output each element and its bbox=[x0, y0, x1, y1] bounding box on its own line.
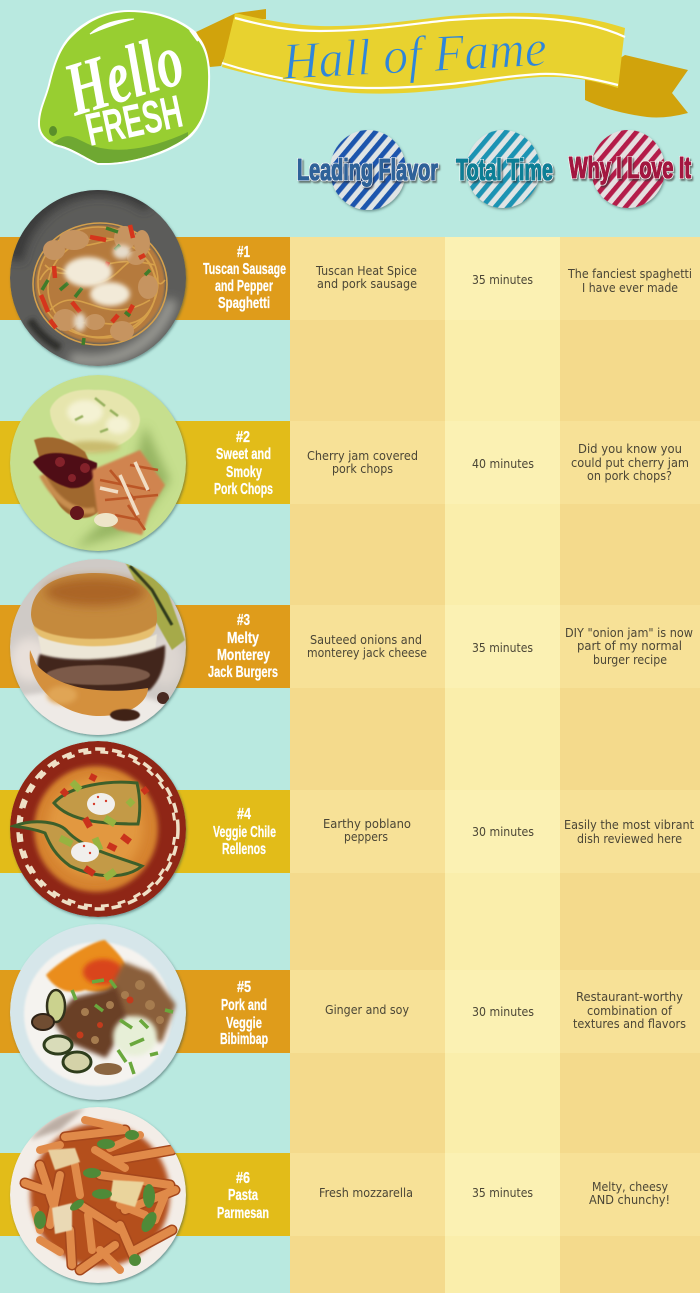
row 2 text: on pork chops? bbox=[587, 468, 672, 483]
logo wordmark Hello: Hello bbox=[55, 17, 193, 132]
label: #5 bbox=[220, 979, 268, 1048]
row 1 text: 35 minutes bbox=[472, 272, 533, 287]
label: #1: Tuscan Sausage bbox=[203, 261, 286, 278]
label: #1: and Pepper bbox=[215, 278, 273, 295]
row 6 text: 35 minutes bbox=[472, 1185, 533, 1200]
label: #2: Pork Chops bbox=[214, 481, 273, 498]
row 6 text: Melty, cheesy bbox=[592, 1179, 669, 1194]
row 1 text: I have ever made bbox=[582, 280, 678, 295]
label: #3: Melty bbox=[227, 630, 259, 647]
dish 1: Tuscan sausage spaghetti bbox=[10, 188, 186, 366]
row bands bbox=[0, 237, 290, 1236]
row 1 text: Tuscan Heat Spice bbox=[315, 263, 417, 278]
label: #5: Veggie bbox=[226, 1015, 262, 1032]
label: #2: Sweet and bbox=[216, 446, 271, 463]
label: #6: Parmesan bbox=[217, 1205, 269, 1222]
label: #5: Pork and bbox=[221, 997, 267, 1014]
row 5 text: 30 minutes bbox=[472, 1004, 534, 1019]
row 3 text: 35 minutes bbox=[472, 640, 533, 655]
row 3 text bbox=[307, 625, 693, 667]
row 1 text: and pork sausage bbox=[317, 276, 417, 291]
label: #3 bbox=[208, 612, 278, 681]
row 2 text: pork chops bbox=[332, 461, 393, 476]
row 4 text: 30 minutes bbox=[472, 824, 534, 839]
table grid bbox=[290, 237, 700, 1293]
label: #5: Bibimbap bbox=[220, 1031, 268, 1048]
column heading: Total Time bbox=[456, 130, 553, 208]
row 3 text: Sauteed onions and bbox=[310, 632, 422, 647]
label: #4: Rellenos bbox=[222, 841, 266, 858]
label: #6 bbox=[217, 1170, 269, 1222]
row 5 text bbox=[325, 989, 686, 1031]
row 1 text bbox=[315, 263, 692, 295]
title: Hall of Fame: Hall of Fame bbox=[281, 20, 548, 91]
dish 3: Melty Monterey Jack burger bbox=[0, 559, 186, 739]
row 4 text: dish reviewed here bbox=[577, 831, 682, 846]
logo: HelloFresh lime bbox=[38, 10, 210, 165]
row 3 text: burger recipe bbox=[593, 652, 667, 667]
label: #6: Pasta bbox=[228, 1187, 258, 1204]
label: #2: #2 bbox=[236, 429, 250, 446]
label: #4 bbox=[213, 806, 276, 858]
column heading: Leading Flavor bbox=[297, 130, 438, 210]
label: #4: Veggie Chile bbox=[213, 824, 276, 841]
label: #1 bbox=[203, 244, 286, 312]
row 4 text bbox=[323, 816, 694, 846]
label: #2 bbox=[214, 429, 273, 498]
row 3 text: monterey jack cheese bbox=[307, 645, 427, 660]
dish 2: Sweet and smoky pork chops bbox=[10, 375, 186, 551]
label: #3: Monterey bbox=[217, 647, 270, 664]
row 5 text: Ginger and soy bbox=[325, 1002, 410, 1017]
dish 4: Veggie chile rellenos bbox=[10, 741, 186, 917]
column heading: Leading Flavor: Leading Flavor bbox=[297, 152, 438, 187]
label: #6: #6 bbox=[236, 1170, 250, 1187]
ribbon back folds bbox=[196, 9, 688, 118]
label: #3: #3 bbox=[237, 612, 250, 629]
row 2 text: could put cherry jam bbox=[571, 455, 689, 470]
icon: blue striped plate bbox=[330, 130, 406, 210]
dish 5: Pork and veggie bibimbap bbox=[10, 924, 186, 1100]
column heading: Why I Love It bbox=[569, 130, 691, 208]
row 2 text: Did you know you bbox=[578, 441, 682, 456]
dish 6: Pasta parmesan bbox=[10, 1107, 186, 1283]
row 3 text: part of my normal bbox=[577, 638, 682, 653]
banner ribbon bbox=[196, 9, 688, 118]
label: #1: Spaghetti bbox=[218, 295, 270, 312]
row 5 text: textures and flavors bbox=[573, 1016, 686, 1031]
row 5 text: combination of bbox=[587, 1003, 673, 1018]
label: #3: Jack Burgers bbox=[208, 664, 278, 681]
logo wordmark FRESH: FRESH bbox=[81, 85, 187, 156]
icon: teal striped plate bbox=[466, 130, 540, 208]
row 6 text bbox=[319, 1179, 670, 1207]
column heading: Total Time: Total Time bbox=[456, 152, 553, 187]
icon: red striped plate bbox=[591, 130, 665, 208]
label: #1: #1 bbox=[237, 244, 250, 261]
row 6 text: AND chunchy! bbox=[589, 1192, 670, 1207]
row 4 text: peppers bbox=[344, 829, 388, 844]
row 2 text: 40 minutes bbox=[472, 456, 534, 471]
row 2 text: Cherry jam covered bbox=[307, 448, 418, 463]
label: #2: Smoky bbox=[226, 464, 262, 481]
label: #5: #5 bbox=[237, 979, 251, 996]
ribbon front bbox=[222, 13, 625, 94]
row 6 text: Fresh mozzarella bbox=[319, 1185, 413, 1200]
row 2 text bbox=[307, 441, 689, 483]
row 5 text: Restaurant-worthy bbox=[576, 989, 684, 1004]
label: #4: #4 bbox=[237, 806, 251, 823]
row 4 text: Earthy poblano bbox=[323, 816, 411, 831]
